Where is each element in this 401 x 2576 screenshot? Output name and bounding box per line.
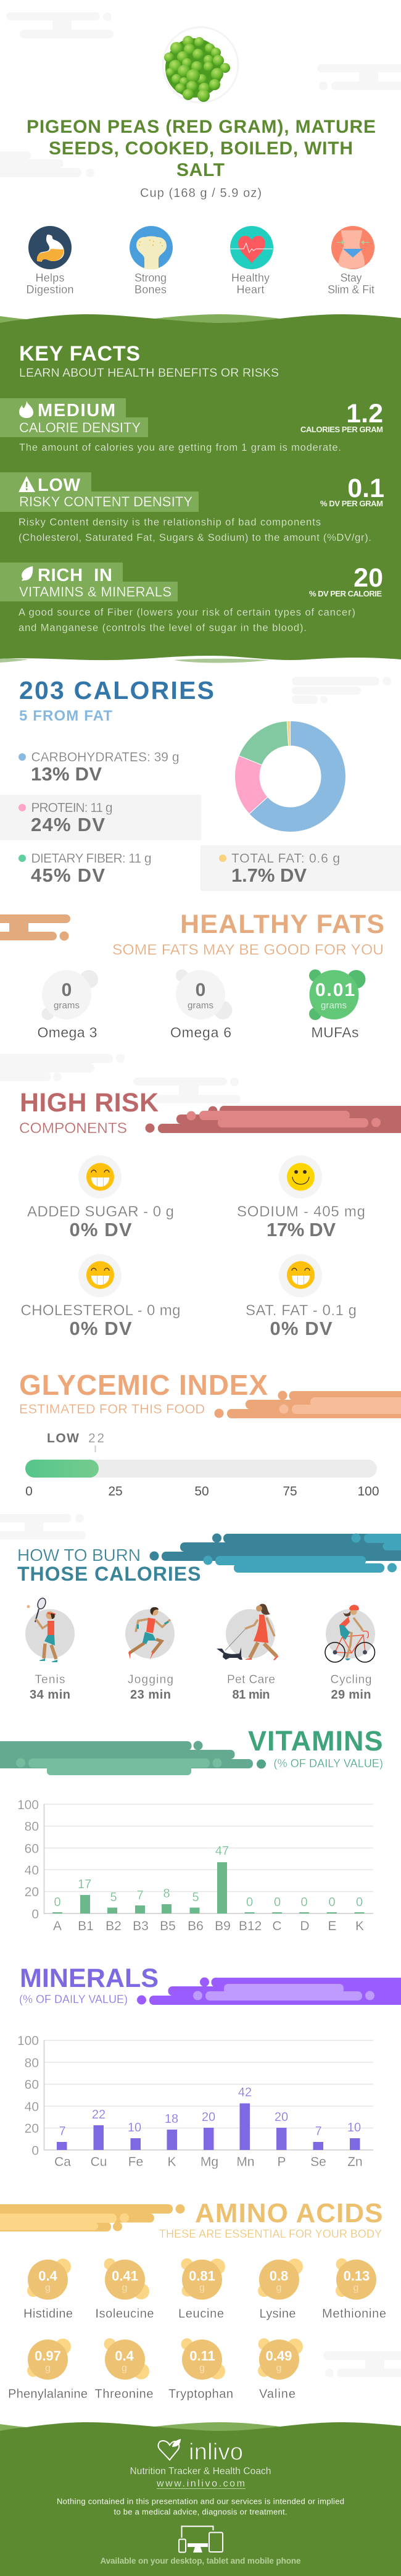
- legend: dietary fiber: [19, 851, 152, 886]
- activity: tennis: [25, 1597, 75, 1702]
- fact: calorie density: CALORIE DENSITY: [19, 420, 141, 435]
- amino: histidine: [23, 2259, 73, 2320]
- bar chart: vitamins: A: [53, 1919, 62, 1933]
- fact: risky content density: LOW: [38, 475, 81, 495]
- heading: minerals: (% OF DAILY VALUE): [19, 1993, 128, 2005]
- amino: leucine: Leucine: [178, 2307, 224, 2320]
- bar chart: minerals: 60: [25, 2078, 39, 2092]
- item: added sugar: 0% DV: [69, 1219, 132, 1240]
- benefit: strong bones: [130, 226, 173, 296]
- bar chart: vitamins: B5: [160, 1919, 176, 1933]
- serving size: Cup (168 g / 5.9 oz): [140, 186, 262, 200]
- disclaimer: to be a medical advice, diagnosis or treatment.: [114, 2507, 287, 2517]
- bar chart: vitamins: B3: [133, 1919, 149, 1933]
- fact: calorie density: CALORIES PER GRAM: [300, 425, 383, 434]
- fact: rich in vitamins and minerals: and Manganese (controls the level of sugar in the blood).: [19, 622, 307, 634]
- bar chart: vitamins: 100: [17, 1798, 39, 1812]
- heading: vitamins: (% OF DAILY VALUE): [274, 1757, 383, 1770]
- bar chart: vitamins: 20: [25, 1885, 39, 1899]
- fact: calorie density: [0, 398, 383, 453]
- bar chart: vitamins: B1: [78, 1919, 94, 1933]
- item: sodium: SODIUM - 405 mg: [237, 1203, 365, 1220]
- disclaimer: [57, 2497, 344, 2517]
- benefit: helps digestion: [26, 226, 74, 296]
- amino: phenylalanine: 0.97: [35, 2348, 61, 2364]
- item: saturated fat: SAT. FAT - 0.1 g: [246, 1302, 357, 1319]
- heading: healthy fats: [112, 910, 384, 958]
- bar chart: minerals: 20: [202, 2110, 215, 2124]
- amino: valine: Valine: [259, 2387, 296, 2401]
- amino: phenylalanine: g: [45, 2363, 51, 2373]
- tagline and website: [130, 2466, 271, 2489]
- benefit: healthy heart: Healthy: [231, 272, 270, 284]
- gauge: glycemic value: 0: [25, 1484, 33, 1499]
- stat: MUFAs: 0.01: [315, 980, 355, 1000]
- logo: inlivo: inlivo: [189, 2439, 243, 2465]
- title: SALT: [176, 160, 225, 180]
- legend: dietary fiber: DIETARY FIBER: 11 g: [31, 851, 152, 866]
- bar chart: vitamins: 80: [25, 1820, 39, 1834]
- amino: histidine: 0.4: [38, 2269, 58, 2283]
- item: sodium: [237, 1155, 365, 1240]
- fact: risky content density: [0, 472, 384, 543]
- activity: jogging: 23 min: [130, 1688, 171, 1702]
- legend: protein: 24% DV: [31, 814, 105, 835]
- panel: high risk components: [19, 1088, 401, 1339]
- heading: 203 calories: [19, 676, 214, 724]
- bar chart: minerals: 20: [25, 2122, 39, 2136]
- heading: amino acids: THESE ARE ESSENTIAL FOR YOUR BODY: [159, 2228, 382, 2240]
- fact: rich in vitamins and minerals: VITAMINS & MINERALS: [19, 584, 172, 600]
- heading: high risk: COMPONENTS: [19, 1120, 127, 1137]
- bar chart: minerals: Zn: [347, 2155, 363, 2169]
- bar chart: vitamins: 0: [31, 1907, 39, 1922]
- legend: carbohydrates: 13% DV: [31, 763, 102, 785]
- heading: 203 calories: 203 CALORIES: [19, 676, 214, 705]
- gauge: glycemic value: 100: [357, 1484, 379, 1499]
- bar chart: minerals: K: [167, 2155, 176, 2169]
- stat: omega 3: Omega 3: [37, 1024, 97, 1040]
- bar chart: minerals: Cu: [91, 2155, 107, 2169]
- bar chart: minerals: 100: [17, 2034, 39, 2048]
- item: added sugar: [27, 1155, 174, 1240]
- legend: total fat: TOTAL FAT: 0.6 g: [231, 851, 340, 866]
- amino: tryptophan: Tryptophan: [168, 2387, 233, 2401]
- amino: threonine: Threonine: [95, 2387, 153, 2401]
- activity: cycling: Cycling: [331, 1673, 371, 1686]
- item: cholesterol: [21, 1254, 180, 1339]
- amino: valine: g: [276, 2363, 281, 2373]
- bar chart: minerals: P: [277, 2155, 286, 2169]
- bar chart: minerals: 40: [25, 2100, 39, 2114]
- amino: threonine: 0.4: [115, 2348, 134, 2364]
- item: saturated fat: 0% DV: [270, 1318, 333, 1339]
- activity: pet care: Pet Care: [227, 1673, 275, 1686]
- activity: jogging: [125, 1607, 175, 1702]
- benefit: healthy heart: Heart: [237, 283, 264, 296]
- amino: tryptophan: [168, 2338, 233, 2401]
- item: cholesterol: CHOLESTEROL - 0 mg: [21, 1302, 180, 1319]
- bar chart: minerals: 42: [238, 2086, 252, 2099]
- amino: valine: [258, 2338, 303, 2401]
- panel: healthy fats: [0, 910, 384, 1040]
- amino: lysine: 0.8: [270, 2269, 288, 2283]
- benefit: stay slim and fit: Slim & Fit: [328, 283, 374, 296]
- header graphic: minerals: [137, 1977, 401, 2005]
- item: saturated fat: [246, 1254, 357, 1339]
- amino: tryptophan: 0.11: [189, 2348, 215, 2364]
- amino: methionine: g: [353, 2283, 358, 2293]
- bar chart: vitamins: B6: [188, 1919, 204, 1933]
- amino: isoleucine: [95, 2259, 154, 2320]
- gauge: glycemic value: 50: [194, 1484, 209, 1499]
- activity: pet care: [217, 1604, 278, 1702]
- legend: protein: PROTEIN: 11 g: [31, 801, 112, 815]
- title: [27, 117, 376, 180]
- panel: key facts: [0, 314, 401, 663]
- benefit: strong bones: Bones: [134, 283, 167, 296]
- activity: pet care: 81 min: [232, 1688, 270, 1702]
- bar chart: vitamins: E: [328, 1919, 337, 1933]
- heading: amino acids: AMINO ACIDS: [195, 2198, 382, 2228]
- gauge: glycemic value: 22: [88, 1431, 104, 1445]
- bar chart: vitamins: 8: [163, 1887, 170, 1901]
- fact: risky content density: 0.1: [347, 474, 384, 503]
- bar chart: minerals: 18: [165, 2112, 178, 2126]
- heading: key facts: KEY FACTS: [19, 342, 140, 366]
- fact: rich in vitamins and minerals: A good source of Fiber (lowers your risk of certain types of cancer): [19, 607, 355, 618]
- benefit: healthy heart: [230, 226, 273, 296]
- amino: isoleucine: 0.41: [112, 2269, 138, 2283]
- heading: high risk: [19, 1088, 159, 1137]
- header graphic: vitamins: [0, 1741, 266, 1775]
- logo: inlivo: [159, 2439, 243, 2465]
- bar chart: vitamins: 0: [300, 1896, 308, 1909]
- fact: calorie density: MEDIUM: [38, 401, 115, 420]
- title: SEEDS, COOKED, BOILED, WITH: [49, 138, 353, 159]
- bar chart: minerals: [17, 2034, 373, 2169]
- bar chart: vitamins: 0: [328, 1896, 336, 1909]
- activity: cycling: 29 min: [331, 1688, 371, 1702]
- fact: risky content density: Risky Content density is the relationship of bad components: [19, 517, 321, 528]
- panel: footer: [0, 2422, 401, 2576]
- benefit: helps digestion: Digestion: [26, 283, 74, 296]
- bar chart: vitamins: D: [300, 1919, 310, 1933]
- amino: phenylalanine: [8, 2339, 88, 2401]
- stat: MUFAs: [309, 969, 365, 1040]
- stat: omega 3: [37, 970, 98, 1040]
- bar chart: vitamins: 40: [25, 1863, 39, 1878]
- bar chart: vitamins: B2: [105, 1919, 122, 1933]
- activity: tennis: Tenis: [35, 1673, 65, 1686]
- tagline and website: www.inlivo.com: [156, 2478, 245, 2489]
- fact: rich in vitamins and minerals: [0, 562, 383, 634]
- item: added sugar: ADDED SUGAR - 0 g: [27, 1203, 174, 1220]
- bar chart: minerals: Mn: [236, 2155, 255, 2169]
- amino: histidine: Histidine: [23, 2307, 73, 2320]
- heading: 203 calories: 5 FROM FAT: [19, 708, 112, 724]
- bar chart: minerals: 10: [347, 2121, 361, 2135]
- stat: omega 6: grams: [188, 1000, 213, 1011]
- bar chart: minerals: 20: [275, 2110, 288, 2124]
- panel: how to burn those calories: [17, 1534, 401, 1702]
- bar chart: vitamins: 0: [54, 1896, 61, 1909]
- amino: threonine: g: [122, 2363, 127, 2373]
- header graphic: burn: [149, 1534, 401, 1573]
- stat: omega 3: grams: [54, 1000, 80, 1011]
- legend: total fat: [200, 845, 401, 891]
- legend: protein: [0, 795, 201, 840]
- header graphic: healthy fats: [0, 914, 70, 941]
- benefit: stay slim and fit: Stay: [341, 272, 362, 284]
- heading: healthy fats: SOME FATS MAY BE GOOD FOR YOU: [112, 942, 384, 958]
- stat: omega 6: 0: [196, 980, 205, 1000]
- benefit: strong bones: Strong: [134, 272, 167, 284]
- gauge: glycemic value: 25: [108, 1484, 123, 1499]
- heading: vitamins: VITAMINS: [248, 1725, 382, 1757]
- item: sodium: 17% DV: [267, 1219, 336, 1240]
- bar chart: minerals: Se: [310, 2155, 326, 2169]
- heading: amino acids: [159, 2198, 382, 2240]
- fact: rich in vitamins and minerals: % DV PER CALORIE: [309, 589, 382, 598]
- bar chart: vitamins: 5: [192, 1891, 199, 1904]
- gauge: glycemic value: 75: [283, 1484, 297, 1499]
- legend: total fat: 1.7% DV: [231, 864, 307, 886]
- fact: risky content density: RISKY CONTENT DENSITY: [19, 494, 192, 509]
- amino: tryptophan: g: [199, 2363, 205, 2373]
- bar chart: minerals: 22: [92, 2108, 105, 2122]
- bar chart: minerals: 7: [315, 2125, 322, 2138]
- amino: leucine: 0.81: [189, 2269, 215, 2283]
- bar chart: minerals: Ca: [54, 2155, 71, 2169]
- bar chart: minerals: Mg: [200, 2155, 218, 2169]
- amino: leucine: [178, 2259, 225, 2320]
- heading: how to burn: THOSE CALORIES: [17, 1563, 201, 1585]
- food photo: green pigeon peas: [163, 27, 238, 102]
- bar chart: vitamins: B12: [239, 1919, 262, 1933]
- header graphic: amino acids: [0, 2204, 185, 2231]
- amino: lysine: g: [276, 2283, 281, 2293]
- header graphic: high risk: [146, 1106, 401, 1133]
- bar chart: vitamins: 17: [78, 1878, 91, 1891]
- bar chart: minerals: 10: [128, 2121, 141, 2135]
- amino: threonine: [95, 2338, 153, 2401]
- heading: glycemic index: ESTIMATED FOR THIS FOOD: [19, 1402, 205, 1416]
- amino: methionine: [322, 2259, 386, 2320]
- fact: rich in vitamins and minerals: 20: [353, 563, 383, 593]
- bar chart: minerals: Fe: [128, 2155, 143, 2169]
- heading: healthy fats: HEALTHY FATS: [180, 910, 384, 939]
- bar chart: vitamins: K: [355, 1919, 364, 1933]
- heading: glycemic index: GLYCEMIC INDEX: [19, 1369, 268, 1401]
- stat: omega 6: [170, 969, 232, 1040]
- amino: methionine: 0.13: [344, 2269, 370, 2283]
- heading: how to burn: HOW TO BURN: [17, 1545, 141, 1565]
- amino: leucine: g: [199, 2283, 205, 2293]
- gauge: glycemic value: [25, 1431, 379, 1499]
- amino: methionine: Methionine: [322, 2307, 386, 2320]
- bar chart: vitamins: 7: [136, 1889, 144, 1902]
- fact: risky content density: % DV PER GRAM: [320, 499, 383, 508]
- bar chart: vitamins: B9: [215, 1919, 231, 1933]
- bar chart: vitamins: 0: [356, 1896, 363, 1909]
- amino: isoleucine: g: [122, 2283, 127, 2293]
- legend: carbohydrates: CARBOHYDRATES: 39 g: [31, 750, 179, 764]
- fact: risky content density: (Cholesterol, Saturated Fat, Sugars & Sodium) to the amount (%DV/gr).: [19, 532, 371, 543]
- bar chart: vitamins: 0: [246, 1896, 253, 1909]
- amino: valine: 0.49: [266, 2348, 292, 2364]
- panel: vitamins: [0, 1725, 383, 1933]
- bar chart: vitamins: 60: [25, 1842, 39, 1856]
- fact: calorie density: 1.2: [346, 399, 383, 429]
- activity: jogging: Jogging: [128, 1673, 173, 1686]
- amino: histidine: g: [45, 2283, 51, 2293]
- header graphic: glycemic index: [215, 1390, 401, 1418]
- benefit: helps digestion: Helps: [36, 272, 64, 284]
- bar chart: minerals: 7: [59, 2125, 66, 2138]
- heading: glycemic index: [19, 1369, 268, 1416]
- amino: isoleucine: Isoleucine: [95, 2307, 154, 2320]
- fact: rich in vitamins and minerals: RICH IN: [38, 566, 112, 585]
- fact: calorie density: The amount of calories you are getting from 1 gram is moderate.: [19, 442, 341, 453]
- heading: key facts: LEARN ABOUT HEALTH BENEFITS OR RISKS: [19, 366, 279, 380]
- legend: dietary fiber: 45% DV: [31, 864, 105, 886]
- panel: amino acids: [0, 2198, 386, 2401]
- stat: MUFAs: MUFAs: [311, 1024, 359, 1040]
- amino: phenylalanine: Phenylalanine: [8, 2387, 88, 2401]
- bar chart: vitamins: [17, 1798, 373, 1933]
- bar chart: vitamins: 0: [274, 1896, 281, 1909]
- amino: lysine: Lysine: [259, 2307, 296, 2320]
- heading: minerals: MINERALS: [20, 1963, 159, 1993]
- availability note: Available on your desktop, tablet and mobile phone: [100, 2556, 301, 2566]
- stat: omega 6: Omega 6: [170, 1024, 231, 1040]
- stat: omega 3: 0: [62, 980, 72, 1000]
- stat: MUFAs: grams: [321, 1000, 347, 1011]
- panel: minerals: [17, 1963, 401, 2169]
- activity: tennis: 34 min: [30, 1688, 70, 1702]
- bar chart: minerals: 80: [25, 2056, 39, 2070]
- disclaimer: Nothing contained in this presentation and our services is intended or implied: [57, 2497, 344, 2506]
- benefit: stay slim and fit: [328, 226, 374, 296]
- bar chart: minerals: 0: [31, 2144, 39, 2158]
- tagline and website: Nutrition Tracker & Health Coach: [130, 2466, 271, 2477]
- amino: lysine: [258, 2259, 303, 2320]
- heading: how to burn: [17, 1545, 201, 1585]
- gauge: glycemic value: LOW: [47, 1431, 79, 1445]
- panel: calories: [0, 676, 401, 891]
- activity: cycling: [325, 1605, 375, 1702]
- bar chart: vitamins: 5: [110, 1891, 117, 1904]
- heading: key facts: [19, 342, 279, 380]
- bar chart: vitamins: 47: [215, 1844, 229, 1858]
- donut chart: [235, 721, 345, 832]
- panel: glycemic index: [19, 1369, 401, 1499]
- legend: carbohydrates: [19, 750, 179, 785]
- icon: devices: [179, 2527, 223, 2553]
- title: PIGEON PEAS (RED GRAM), MATURE: [27, 117, 376, 137]
- heading: high risk: HIGH RISK: [20, 1088, 159, 1118]
- item: cholesterol: 0% DV: [69, 1318, 132, 1339]
- bar chart: vitamins: C: [272, 1919, 282, 1933]
